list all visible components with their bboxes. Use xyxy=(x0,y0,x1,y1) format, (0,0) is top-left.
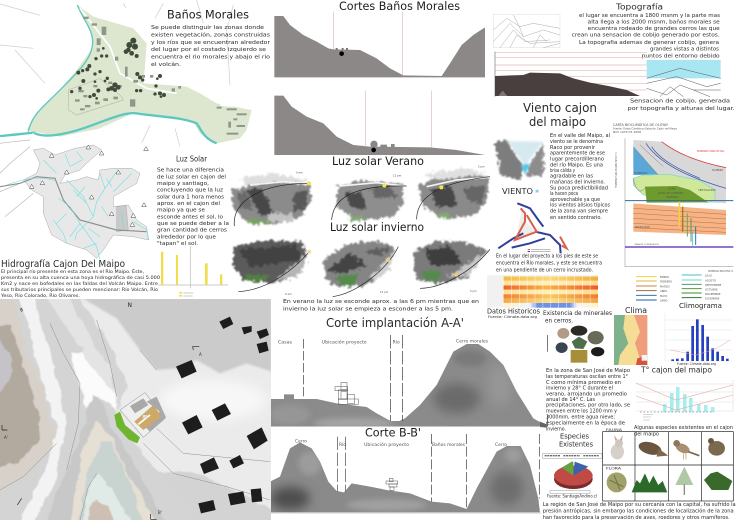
heading: Climograma: Climograma xyxy=(679,302,722,310)
text: project location: encuentra el Río morales, y este se encuentra xyxy=(496,260,602,266)
title: bioclimatic chart xyxy=(613,122,678,134)
chart labels and legend: FEBRERO xyxy=(660,280,672,284)
text: wind description: en sentido contrario. xyxy=(550,215,602,221)
section labels B-B': Cerro xyxy=(295,438,307,444)
text: climate description: 3000mm, entre agua nieve; xyxy=(546,414,615,420)
section labels A-A': Río xyxy=(393,338,400,345)
text: project location: en una pendiente de un cerro incrustado. xyxy=(496,268,593,274)
text: Luz Solar description: alrededor por lo que xyxy=(157,234,217,240)
label: 5 pm summer: 5 pm xyxy=(478,164,485,168)
chart: Olgyay bioclimatic chart xyxy=(625,138,733,300)
text: Luz Solar description: Se hace una diferencia xyxy=(157,168,224,174)
chart: climogram xyxy=(665,313,732,361)
heat table: historical data xyxy=(487,275,598,308)
chart labels and legend: MAYO xyxy=(660,294,667,298)
chart labels and legend: HUMEDAD xyxy=(634,171,647,175)
chart labels and legend: LINEA DE CONGELACION xyxy=(634,243,659,246)
text: climate description: invierno y 28° C durante el xyxy=(546,386,613,392)
photos: summer sun path xyxy=(232,168,490,226)
label: 9 am summer: 9 am xyxy=(296,170,303,174)
text: wind description: de la zona van siempre xyxy=(550,209,608,215)
section labels A-A': Cerro morales xyxy=(456,338,489,344)
title: Viento cajon del maipo xyxy=(523,101,597,129)
text: Baños Morales description: Se puede distinguir las zonas donde xyxy=(151,25,265,31)
text: summer and winter sun comparison xyxy=(283,299,479,313)
heading: Topografía: Topografía xyxy=(615,2,663,12)
text: Luz Solar description: maipo ya que se xyxy=(157,208,206,214)
label: FLORA: FLORA xyxy=(606,465,621,470)
section labels A-A' xyxy=(278,338,489,345)
text: hydrography description: El principal río presente en esta zona es el Río Maipo. Éste, xyxy=(1,267,145,275)
text: wind description: aparentemente de ese xyxy=(550,151,605,157)
text: topography description: el lugar se encuentra a 1800 msnm y la parte mas xyxy=(579,13,720,19)
label: 9 am winter: 9 am xyxy=(285,292,292,296)
chart labels and legend: ZONA DE CONFORT xyxy=(658,191,684,195)
text: wind description: aprovechable ya que xyxy=(550,197,600,203)
section: Baños Morales lower xyxy=(274,91,485,155)
text: shelter caption xyxy=(628,99,735,112)
label: 12 pm summer: 12 pm xyxy=(393,174,402,178)
text: wind description: brisa cálida y xyxy=(550,167,575,174)
heading: Especies Existentes xyxy=(559,432,593,449)
chart labels and legend: JUNIO xyxy=(659,298,667,302)
title: Luz solar invierno: Luz solar invierno xyxy=(330,220,424,234)
text: wind description xyxy=(550,133,610,221)
heading: Especies Existentes: Especies xyxy=(560,432,589,440)
text: climate description: En la zona de San José de Maipo xyxy=(546,367,631,374)
source: species: Fuente: SantiagoAndino.cl xyxy=(547,494,597,500)
text: topography description xyxy=(572,13,720,66)
label: FAUNA: FAUNA xyxy=(606,427,623,432)
label: section mark A': A' xyxy=(4,435,8,440)
title: Corte implantación A-A': Corte implantación A-A' xyxy=(326,316,464,330)
chart labels and legend: TEMPERATURA BULBO SECO °C xyxy=(615,152,618,188)
section chart: Corte B-B' xyxy=(270,434,547,513)
section: Baños Morales upper xyxy=(274,12,485,77)
section labels B-B': Río xyxy=(339,441,346,448)
text: shelter caption: por topografia y alturas del lugar. xyxy=(628,106,735,112)
text: Luz Solar description xyxy=(157,168,229,247)
site plan: Baños Morales xyxy=(0,0,270,147)
text: topography description: encuentra rodeado de grandes cerros las que xyxy=(588,26,720,32)
title: bioclimatic chart: NCh 1079 Of. 2008 xyxy=(613,131,642,134)
sketch: shelter view xyxy=(647,60,721,97)
site map: implantation xyxy=(0,297,273,520)
text: wind description: Raco por provenir xyxy=(550,145,596,151)
text: Luz Solar description: solar dura 1 hora menos xyxy=(157,194,224,200)
text: climate description xyxy=(546,367,631,433)
title: Hidrografía Cajon Del Maipo: Hidrografía Cajon Del Maipo xyxy=(1,259,125,270)
text: wind description: mañanas del invierno. xyxy=(550,179,605,185)
chart labels and legend: VENTILACION xyxy=(698,188,716,192)
source: climogram: Fuente: Climate-data.org xyxy=(677,361,716,366)
text: hydrography description xyxy=(0,267,160,299)
title: Baños Morales: Baños Morales xyxy=(167,8,249,22)
section labels A-A': Ubicación proyecto xyxy=(322,338,367,345)
title: Viento cajon del maipo: del maipo xyxy=(529,115,586,129)
contour sketch xyxy=(493,14,560,48)
text: climate description: C como mínima promedio en xyxy=(546,379,621,386)
chart labels and legend: ZONA xyxy=(668,186,676,190)
text: Baños Morales description: del lugar por el costado izquierdo se xyxy=(151,47,267,53)
bar chart: solar hours xyxy=(158,246,228,297)
heading: Existencia de minerales: en cerros. xyxy=(545,318,573,325)
photos: minerals xyxy=(547,326,604,363)
text: topography description: alta llega a los 2000 msnm, baños morales se xyxy=(588,20,720,26)
label: north: N xyxy=(128,302,132,309)
heading: Luz Solar: Luz Solar xyxy=(176,154,208,164)
chart labels and legend: AGOSTO xyxy=(705,278,716,282)
text: Baños Morales description xyxy=(151,25,271,68)
text: hydrography description: presenta en su alta cuenca una hoya hidrográfica de casi 5.000 xyxy=(1,274,160,281)
chart labels and legend: NOVIEMBRE xyxy=(705,292,721,296)
title: Luz solar Verano: Luz solar Verano xyxy=(332,154,424,168)
section labels B-B': Baños morales xyxy=(432,442,466,448)
title: bioclimatic chart: CARTA BIOCLIMÁTICA DE OLGYAY xyxy=(613,122,669,127)
chart labels and legend: MARZO xyxy=(660,284,670,288)
heading: Clima: Clima xyxy=(625,306,647,315)
arrow: gray corner mark xyxy=(540,415,548,428)
text: Luz Solar description: concluyendo que la luz xyxy=(157,188,223,194)
label: section mark A: A xyxy=(199,352,202,357)
icon: wind star: ✱ xyxy=(535,189,540,195)
section labels B-B' xyxy=(295,438,507,448)
text: wind description: del río Maipo. Es una xyxy=(550,161,603,168)
text: Baños Morales description: y los ríos que se encuentran alrededor xyxy=(151,39,271,46)
text: shelter caption: Sensacion de cobijo, generada xyxy=(630,99,730,105)
diagram: wind and river map xyxy=(498,203,567,253)
chart labels and legend xyxy=(615,150,733,302)
chart: species pie xyxy=(543,453,602,493)
table: fauna and flora xyxy=(603,432,733,501)
text: wind description: lugar precordillerano xyxy=(550,156,605,162)
chart labels and legend: ENERO xyxy=(660,275,669,279)
heading: Datos Historicos: Datos Historicos xyxy=(487,308,540,316)
section labels B-B': Cerro xyxy=(495,442,507,448)
text: Luz Solar description: gran cantidad de cerros xyxy=(157,228,227,234)
text: climate description: precipitaciones, por otro lado, se xyxy=(546,403,631,409)
chart labels and legend: OCTUBRE xyxy=(705,288,718,292)
text: wind description: la hacen poca xyxy=(550,191,578,197)
map: climate zones xyxy=(614,315,647,365)
chart: temperature xyxy=(636,380,733,420)
text: Baños Morales description: existen vegetación, zonas construidas xyxy=(151,31,270,38)
label: 5 pm winter: 5 pm xyxy=(470,289,477,293)
text: wind description: Su poca predictibilidad xyxy=(550,185,608,191)
heading: Existencia de minerales: Existencia de minerales xyxy=(543,309,613,317)
title: Viento cajon del maipo: Viento cajon xyxy=(523,101,597,115)
text: topography description: puntos del entorno debido xyxy=(642,53,720,59)
section labels B-B': Ubicación proyecto xyxy=(364,441,409,448)
heading: VIENTO: VIENTO xyxy=(502,187,533,196)
text: climate description: especialmente en la época de xyxy=(546,419,626,426)
chart labels and legend: HUMEDAD RELATIVA % xyxy=(708,270,733,273)
text: topography description: grandes vistas a distintos xyxy=(650,47,719,53)
text: hydrography description: Km2 y nace en bofedales en las faldas del Volcán Maipo. Entre xyxy=(1,280,158,287)
section chart: Corte A-A' xyxy=(270,335,547,429)
text: San José de Maipo region xyxy=(543,501,736,520)
text: wind description: viento se le denomina xyxy=(550,139,603,145)
text: Baños Morales description: el volcán. xyxy=(151,61,181,68)
chart labels and legend: ABRIL xyxy=(660,289,668,293)
text: climate description: mueven entre los 1200 mm y xyxy=(546,408,618,414)
topographic profile xyxy=(495,52,647,97)
chart labels and legend: DICIEMBRE xyxy=(705,296,720,300)
heading: fauna intro: del maipo xyxy=(634,432,660,438)
text: Luz Solar description: "tapan" el sol. xyxy=(157,241,198,247)
text: wind description: agradable en las xyxy=(550,174,593,180)
text: climate description: invierno. xyxy=(546,427,566,433)
photo: valley wind xyxy=(495,140,543,180)
chart labels and legend: PROBABLE ZONA DE SOL xyxy=(697,150,725,153)
label: 12 pm winter: 12 pm xyxy=(380,290,389,294)
label: section mark B: B xyxy=(19,307,25,314)
text: project location: En el lugar del proyecto a los pies de este se xyxy=(496,254,598,260)
text: climate description: las temperaturas oscilan entre 1° xyxy=(546,374,628,380)
label: section mark B': B' xyxy=(158,510,162,515)
text: topography description: a su altura. xyxy=(688,60,720,66)
text: Luz Solar description: que se puede deber a la xyxy=(157,221,229,227)
text: wind description: los vientos alisios típicos xyxy=(550,202,610,209)
text: climate description: anual de 14° C. Las xyxy=(546,397,595,403)
source: climate data: Fuente: Climate-data.org xyxy=(488,314,538,319)
chart labels and legend: RADIACION xyxy=(635,225,650,229)
heading: T° cajon del maipo: T° cajon del maipo xyxy=(640,366,712,375)
chart labels and legend: INVIERNO xyxy=(666,195,679,199)
text: topography description: La topografia ademas de generar cobijo, genera xyxy=(579,40,719,46)
title: bioclimatic chart: Fuente: Datos Climáticos Estación Cajón del Maipo xyxy=(613,128,678,130)
text: Luz Solar description: maipo y santiago, xyxy=(157,181,209,187)
heading: fauna intro xyxy=(634,425,733,438)
text: summer and winter sun comparison: En verano la luz se esconde aprox. a las 6 pm mientras que en xyxy=(283,299,479,305)
text: Luz Solar description: aprox. en el cajon del xyxy=(157,201,220,207)
chart labels and legend: SOMBRA xyxy=(712,168,723,172)
chart labels and legend: SEPTIEMBRE xyxy=(705,283,722,287)
text: Baños Morales description: encuentra el rio morales y abajo el rio xyxy=(151,55,271,61)
text: project location xyxy=(496,254,602,274)
chart labels and legend: JULIO xyxy=(704,274,712,278)
text: wind description: En el valle del Maipo, al xyxy=(550,133,610,139)
hydrography map xyxy=(0,140,149,260)
section labels A-A': Casas xyxy=(278,339,293,345)
text: climate description: verano, arrojando un promedio xyxy=(546,392,628,398)
text: Luz Solar description: de luz solar en cajon del xyxy=(157,174,226,180)
text: hydrography description: sus tributarios principales se pueden mencionar: Río Volcán, Río xyxy=(1,286,158,293)
text: hydrography description: Yeso, Río Colorado, Río Olivares. xyxy=(0,292,80,299)
text: topography description: crean una sensacion de cobijo generado por estos. xyxy=(572,33,720,39)
photos: winter sun path xyxy=(233,240,490,297)
heading: Especies Existentes: Existentes xyxy=(559,441,593,449)
text: Luz Solar description: esconde antes el sol, lo xyxy=(157,214,224,220)
text: summer and winter sun comparison: invierno la luz solar se empieza a esconder a las 5 pm. xyxy=(283,307,453,313)
title: Corte B-B': Corte B-B' xyxy=(365,426,421,440)
heading: Existencia de minerales xyxy=(543,309,613,325)
